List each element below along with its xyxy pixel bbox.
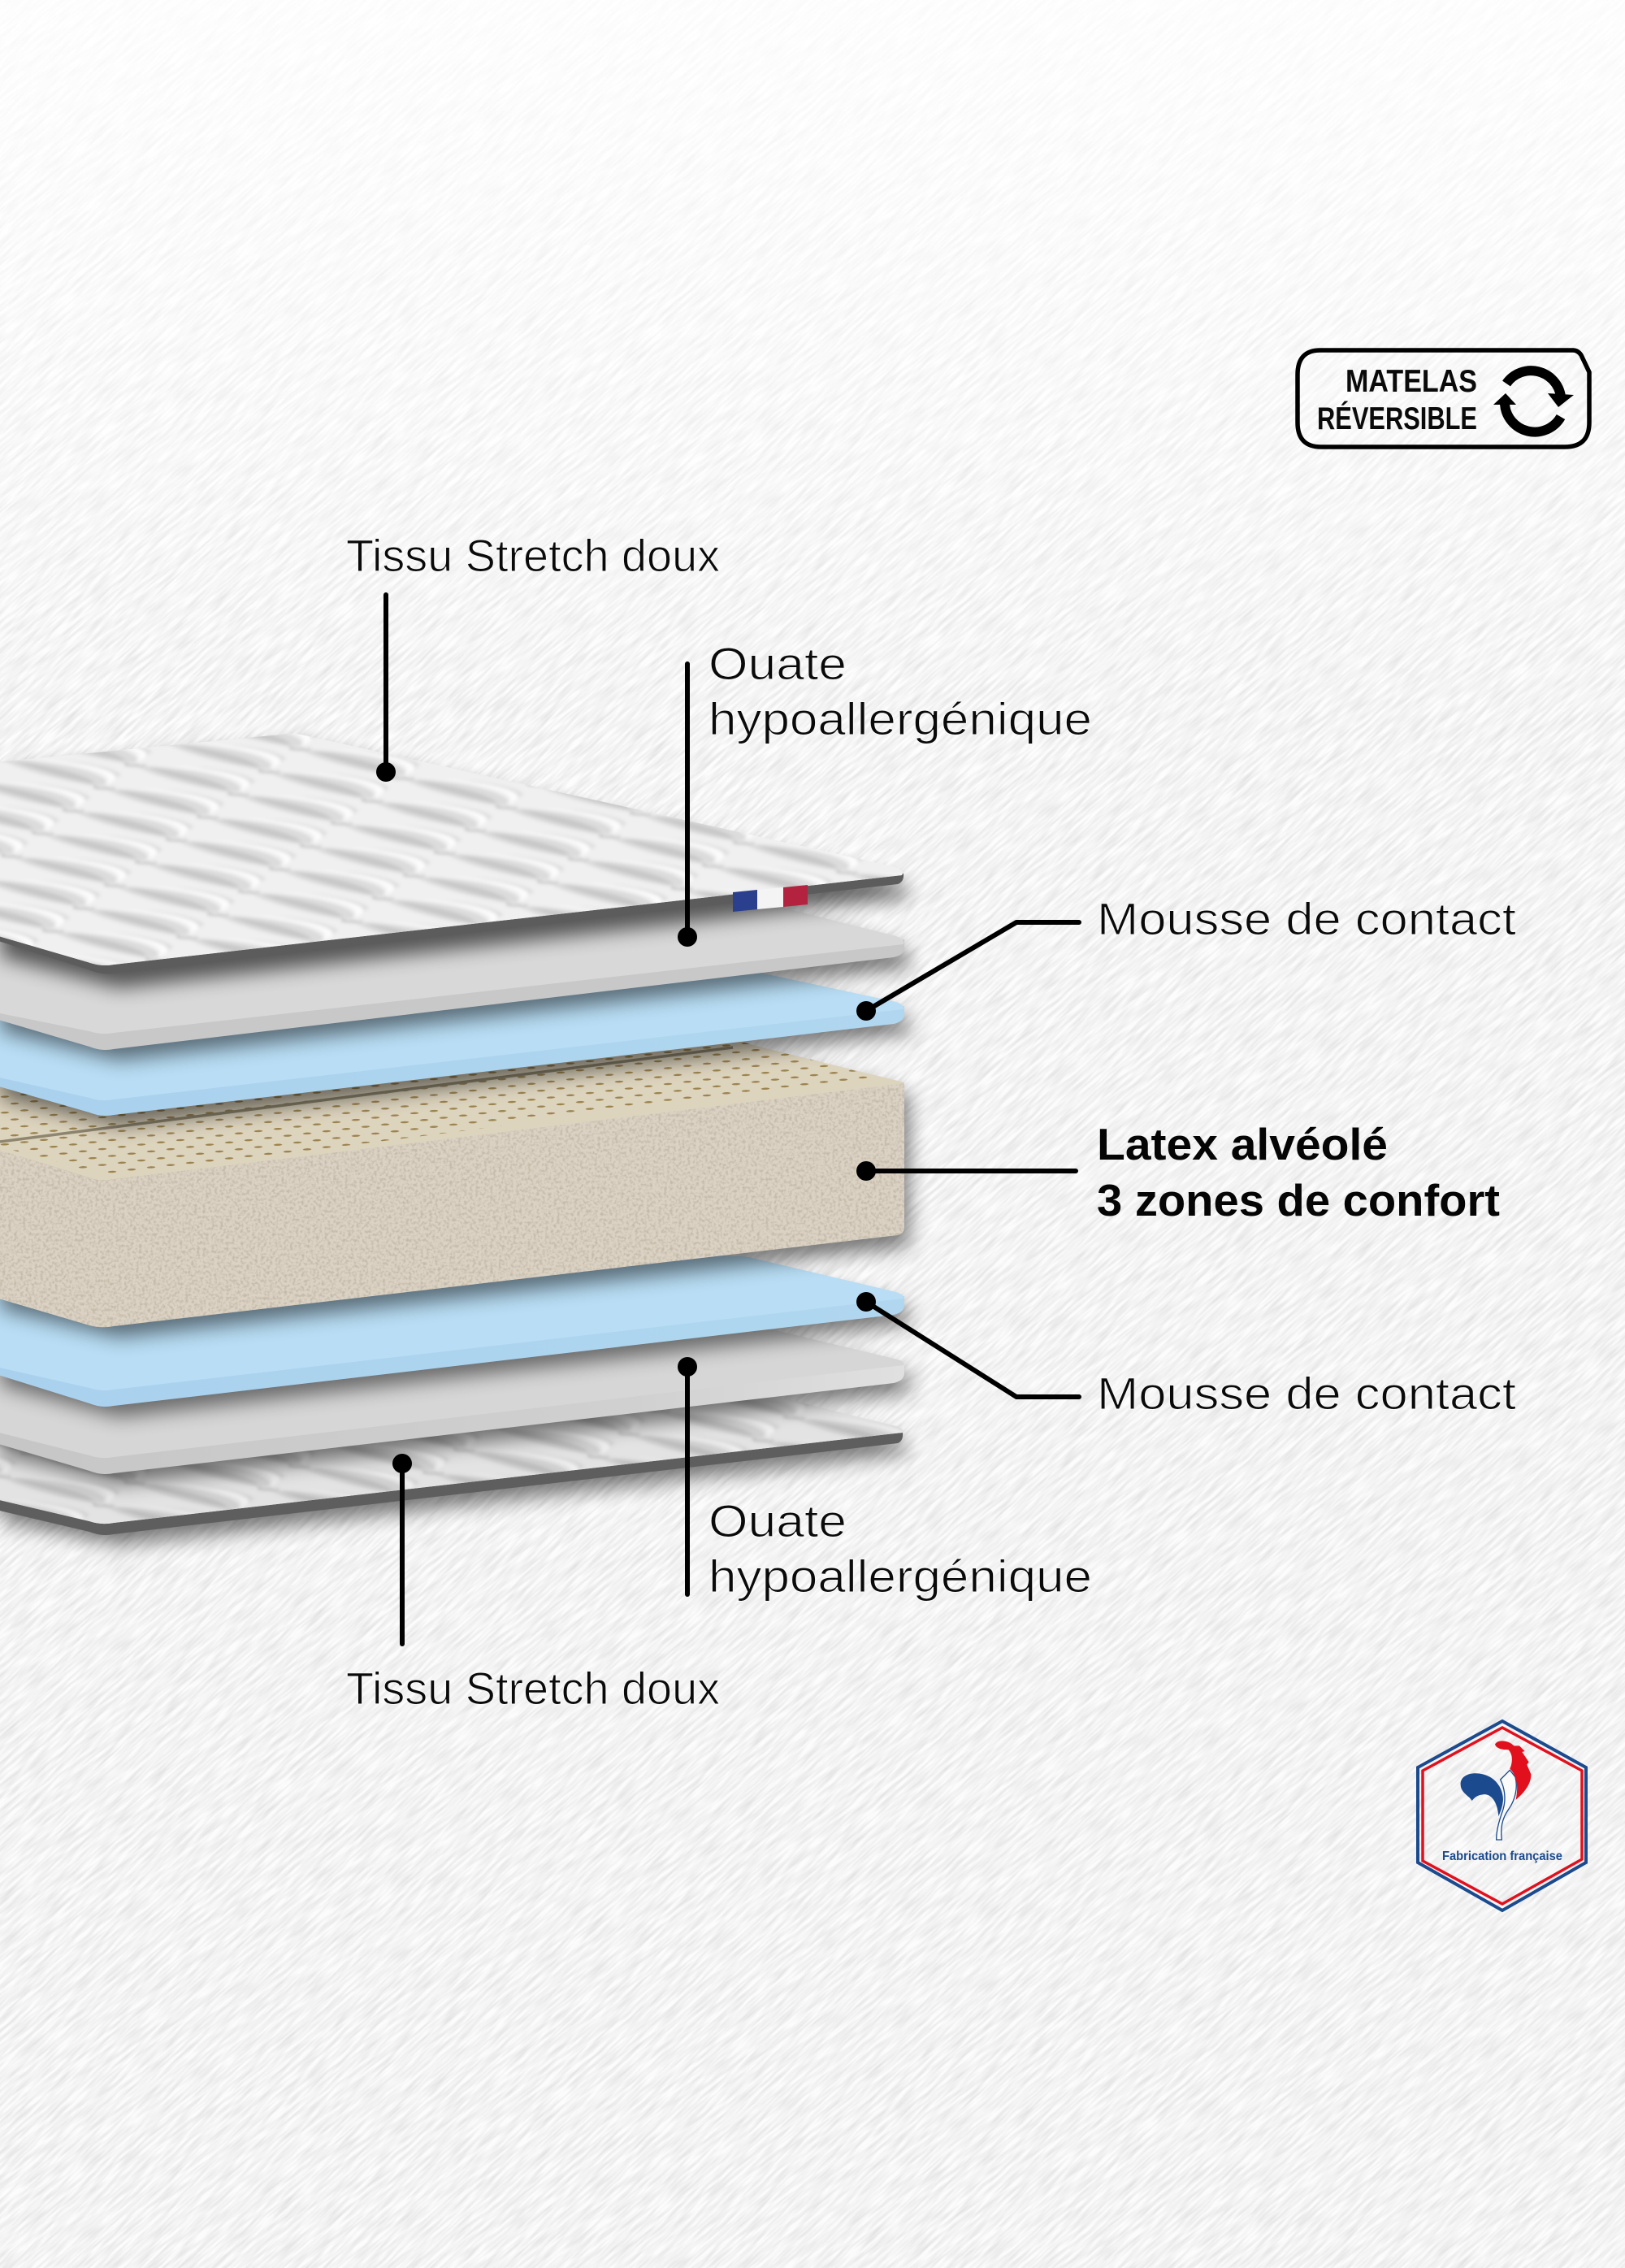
layer: top quilted stretch fabric	[0, 723, 918, 988]
badge: Fabrication française	[1418, 1721, 1586, 1910]
callout: upper wadding	[678, 638, 1092, 947]
badge: matelas réversible: RÉVERSIBLE	[1317, 401, 1477, 436]
layer: bottom stretch fabric	[0, 1373, 918, 1546]
callout: latex core: 3 zones de confort	[1097, 1175, 1500, 1225]
badge: matelas réversible	[1298, 350, 1589, 447]
layer: upper contact foam	[0, 969, 909, 1126]
callout: latex core: Latex alvéolé	[1097, 1119, 1388, 1169]
layer: upper hypoallergenic wadding	[0, 813, 909, 1060]
icon: rooster	[1461, 1741, 1531, 1840]
callout: lower wadding: Ouate	[708, 1495, 847, 1546]
callout: upper contact foam: Mousse de contact	[1097, 893, 1516, 944]
callout: bottom stretch fabric: Tissu Stretch doux	[346, 1663, 720, 1714]
callout: latex core	[856, 1119, 1500, 1225]
callout: lower wadding	[678, 1357, 1092, 1602]
icon: reverse arrows	[1493, 371, 1574, 432]
callout: upper wadding: Ouate	[708, 638, 847, 689]
callout: top stretch fabric: Tissu Stretch doux	[346, 530, 720, 581]
callout: bottom stretch fabric	[346, 1454, 720, 1714]
badge: Fabrication française: Fabrication française	[1442, 1850, 1562, 1863]
callout: upper wadding: hypoallergénique	[708, 693, 1092, 744]
callout: upper contact foam	[856, 893, 1516, 1021]
layer: perforated latex core	[0, 1040, 918, 1338]
badge: matelas réversible: MATELAS	[1346, 364, 1477, 399]
layer: lower contact foam	[0, 1178, 909, 1417]
callout: lower wadding: hypoallergénique	[708, 1550, 1092, 1602]
callout: top stretch fabric	[346, 530, 720, 782]
callout: lower contact foam: Mousse de contact	[1097, 1368, 1516, 1419]
callout: lower contact foam	[856, 1292, 1516, 1419]
layer: lower hypoallergenic wadding	[0, 1300, 909, 1485]
icon: French flag tag	[733, 885, 808, 912]
